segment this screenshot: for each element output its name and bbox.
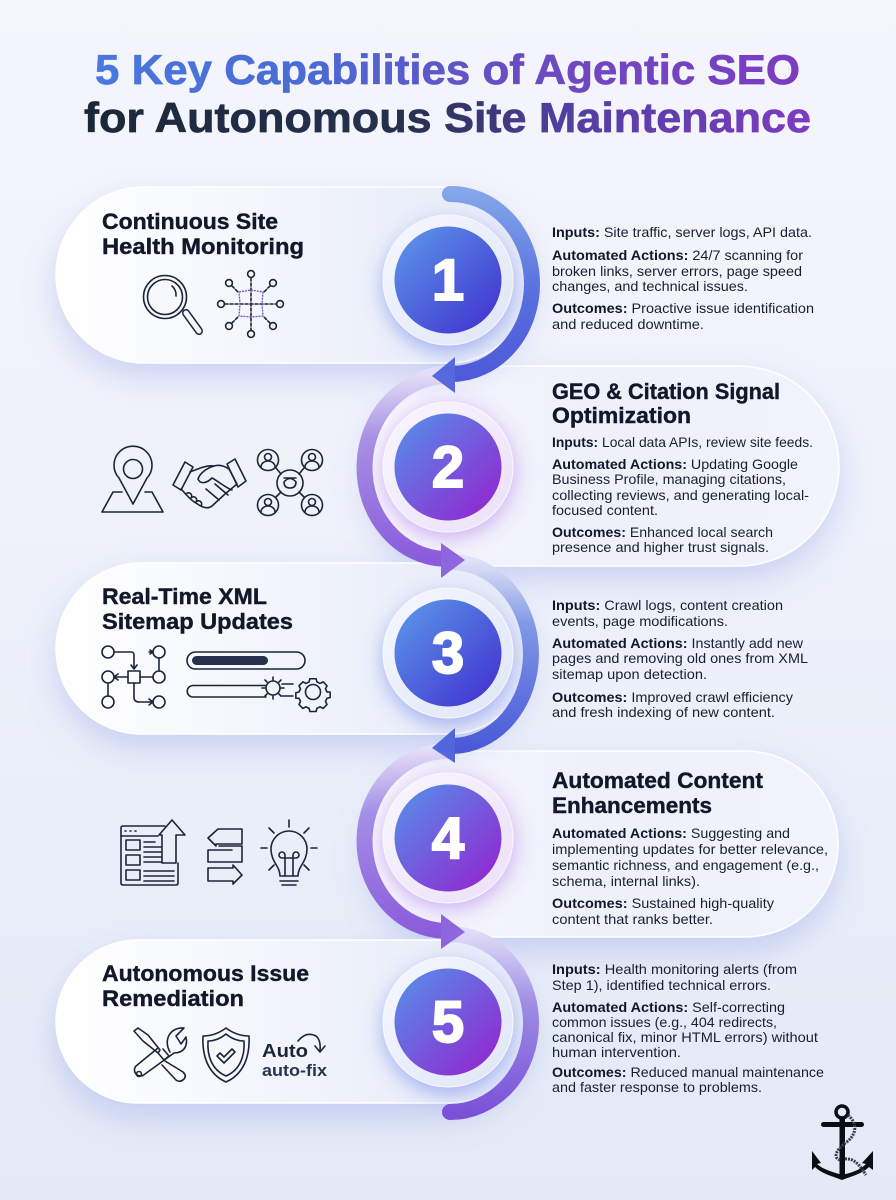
text: step 3 details: events, page modifications. <box>552 613 728 629</box>
badge: number 3 <box>383 588 513 718</box>
heading: continuous site health monitoring: Continuous Site <box>102 209 278 234</box>
text: step 1 details: and reduced downtime. <box>552 316 704 332</box>
text: step 1 details: Outcomes: Proactive issue identification <box>552 300 814 316</box>
text: step 2 details: focused content. <box>552 502 658 518</box>
text: step 4 details: content that ranks better. <box>552 911 713 927</box>
text: step 3 details: Automated Actions: Instantly add new <box>552 635 804 651</box>
icon: people network <box>258 450 322 516</box>
icon: flow diagram <box>102 646 165 708</box>
heading: GEO and citation signal optimization: Optimization <box>552 403 691 428</box>
panel: step 2 GEO and citations <box>102 366 839 566</box>
text: step 5 details: canonical fix, minor HTML errors) without <box>552 1029 818 1045</box>
icon: swap arrows <box>208 829 242 884</box>
text: step 2 details: presence and higher trust signals. <box>552 539 769 555</box>
text: step 5 details: Inputs: Health monitoring alerts (from <box>552 961 797 977</box>
arrow: step 1 to 2 <box>432 194 532 393</box>
text: step 2 details: collecting reviews, and generating local- <box>552 487 809 503</box>
icon: progress bars and gears <box>187 652 330 712</box>
heading: GEO and citation signal optimization <box>552 379 780 428</box>
text: step 4 details: semantic richness, and engagement (e.g., <box>552 857 819 873</box>
icon: auto fix label: auto-fix <box>262 1062 328 1080</box>
text: step 2 details: Inputs: Local data APIs, review site feeds. <box>552 434 813 450</box>
title: 5 Key Capabilities of Agentic SEO <box>95 46 800 93</box>
panel: step 3 sitemap updates <box>56 563 530 734</box>
badge: number 1 <box>383 215 513 345</box>
text: step 1 details: Automated Actions: 24/7 scanning for <box>552 247 803 263</box>
icon: handshake <box>173 459 246 508</box>
arrow: step 4 to 5 <box>365 751 465 949</box>
text: step 4 details <box>552 825 828 927</box>
text: step 2 details: Automated Actions: Updating Google <box>552 456 798 472</box>
badge: number 2 <box>383 402 513 532</box>
text: step 4 details: Outcomes: Sustained high-quality <box>552 895 774 911</box>
panel: step 5 issue remediation <box>56 940 531 1103</box>
icon: map pin <box>102 446 163 512</box>
icon: auto fix label <box>262 1034 328 1080</box>
icon: wrench and screwdriver <box>134 1028 186 1081</box>
badge: number 3: 3 <box>432 621 464 686</box>
heading: automated content enhancements: Automated Content <box>552 768 764 793</box>
text: step 3 details: Outcomes: Improved crawl efficiency <box>552 689 793 705</box>
text: step 4 details: implementing updates for better relevance, <box>552 841 828 857</box>
text: step 1 details <box>552 224 814 332</box>
text: step 4 details: Automated Actions: Suggesting and <box>552 825 790 841</box>
text: step 5 details: human intervention. <box>552 1044 681 1060</box>
text: step 2 details: Business Profile, managing citations, <box>552 471 786 487</box>
badge: number 1: 1 <box>432 248 464 313</box>
heading: automated content enhancements <box>552 768 764 818</box>
arrow: step 3 to 4 <box>432 562 531 763</box>
heading: continuous site health monitoring <box>102 209 304 259</box>
badge: number 4: 4 <box>432 806 464 871</box>
panel: step 1 site health <box>56 187 531 363</box>
heading: continuous site health monitoring: Health Monitoring <box>102 234 304 259</box>
heading: real-time xml sitemap updates: Sitemap Updates <box>102 609 293 634</box>
panel: step 4 content enhancements <box>121 751 838 937</box>
badge: number 2: 2 <box>432 435 464 500</box>
text: step 5 details: Step 1), identified technical errors. <box>552 977 771 993</box>
text: step 5 details <box>552 961 824 1095</box>
text: step 3 details: sitemap upon detection. <box>552 666 707 682</box>
heading: GEO and citation signal optimization: GEO & Citation Signal <box>552 379 780 404</box>
icon: light bulb <box>261 820 317 885</box>
arrow: step 5 end <box>450 934 531 1112</box>
icon: dashed network grid <box>218 271 283 337</box>
icon: shield with check <box>203 1028 249 1082</box>
icon: magnifier <box>144 276 199 331</box>
text: step 3 details: and fresh indexing of new content. <box>552 704 775 720</box>
icon: auto fix label: Auto <box>262 1041 308 1061</box>
text: step 5 details: Automated Actions: Self-correcting <box>552 999 785 1015</box>
badge: number 4 <box>383 773 513 903</box>
badge: number 5: 5 <box>432 990 464 1055</box>
text: step 3 details: Inputs: Crawl logs, content creation <box>552 597 783 613</box>
text: step 2 details: Outcomes: Enhanced local search <box>552 524 773 540</box>
icon: page with upload arrow <box>121 820 185 885</box>
icon: anchor logo <box>812 1106 873 1180</box>
text: step 3 details <box>552 597 808 720</box>
heading: autonomous issue remediation: Autonomous Issue <box>102 961 309 986</box>
heading: real-time xml sitemap updates <box>102 584 293 634</box>
text: step 1 details: changes, and technical issues. <box>552 278 748 294</box>
badge: number 5 <box>383 957 513 1087</box>
text: step 3 details: pages and removing old ones from XML <box>552 650 808 666</box>
text: step 5 details: common issues (e.g., 404 redirects, <box>552 1014 777 1030</box>
text: step 1 details: Inputs: Site traffic, server logs, API data. <box>552 224 812 240</box>
heading: autonomous issue remediation <box>102 961 309 1011</box>
heading: autonomous issue remediation: Remediation <box>102 986 244 1011</box>
text: step 5 details: Outcomes: Reduced manual maintenance <box>552 1064 824 1080</box>
heading: automated content enhancements: Enhancements <box>552 793 712 818</box>
text: step 1 details: broken links, server errors, page speed <box>552 263 802 279</box>
text: step 2 details <box>552 434 813 555</box>
heading: real-time xml sitemap updates: Real-Time XML <box>102 584 267 609</box>
text: step 4 details: schema, internal links). <box>552 873 700 889</box>
title: for Autonomous Site Maintenance <box>84 94 811 141</box>
arrow: step 2 to 3 <box>365 376 465 578</box>
text: step 5 details: and faster response to problems. <box>552 1079 762 1095</box>
title <box>84 46 811 141</box>
